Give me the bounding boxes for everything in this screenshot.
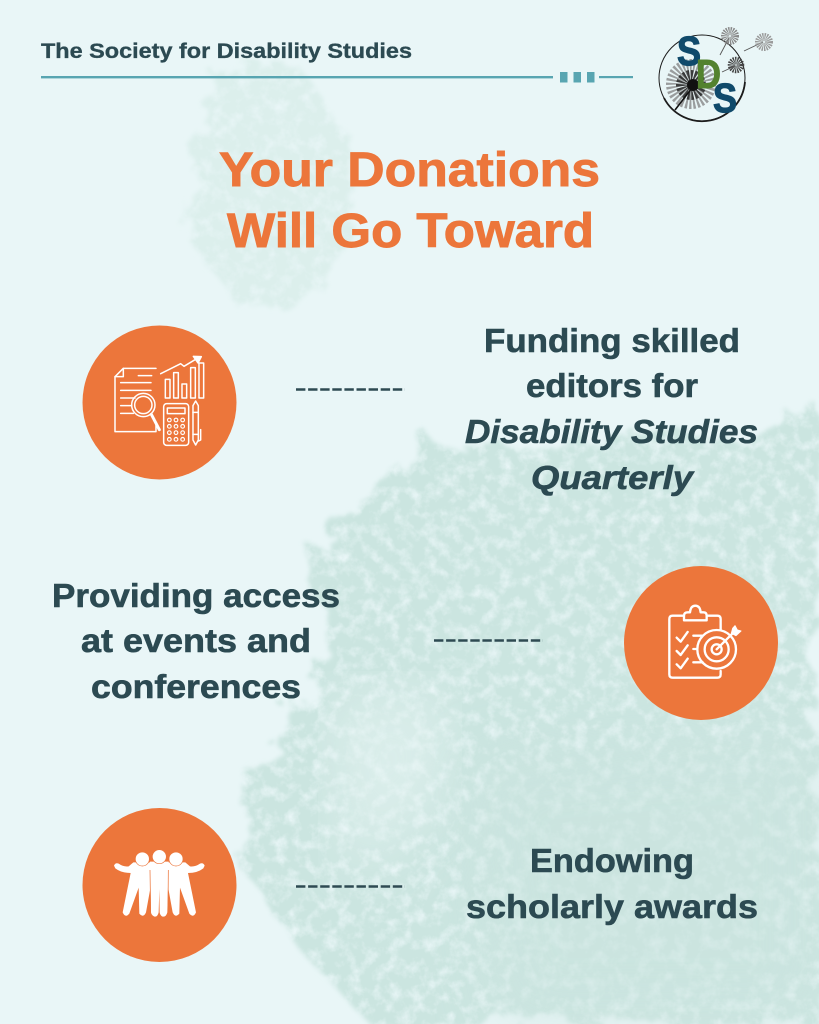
header: organisation name: The Society for Disability Studies <box>41 39 412 63</box>
item 1: text: Disability Studies <box>465 413 758 450</box>
logo: SDS dandelion: D <box>696 51 721 97</box>
item 2: text: at events and <box>81 622 311 659</box>
item 3: text: scholarly awards <box>466 888 758 925</box>
icon: three people embracing <box>114 850 205 917</box>
item 2: text: conferences <box>91 668 301 705</box>
title: Will Go Toward <box>227 205 594 258</box>
item 1: text: editors for <box>526 367 698 404</box>
logo letters: S <box>677 28 701 74</box>
item 2: text: Providing access <box>52 577 340 614</box>
icon: report and analysis <box>115 356 204 445</box>
item 1: text: Quarterly <box>531 459 695 496</box>
item 3: dashed connector <box>296 885 405 888</box>
item 3: icon circle with three people <box>82 808 236 962</box>
logo dandelion head <box>675 71 704 110</box>
logo ring <box>659 35 745 121</box>
item 1: icon circle with report, chart and calculator <box>82 326 236 480</box>
item 2: text <box>52 577 340 705</box>
item 3: text <box>466 842 758 925</box>
title <box>219 144 600 258</box>
logo: SDS dandelion <box>659 28 769 121</box>
item 1: dashed connector <box>296 388 405 391</box>
item 3: text: Endowing <box>530 842 694 879</box>
logo: SDS dandelion: S <box>713 75 737 121</box>
title: Your Donations <box>219 144 600 197</box>
icon: clipboard and target <box>669 606 741 678</box>
item 1: text <box>465 322 758 496</box>
item 2: dashed connector <box>434 639 543 642</box>
item 1: text: Funding skilled <box>484 322 740 359</box>
logo floating seeds <box>720 31 769 72</box>
header rule with three squares <box>41 72 633 82</box>
item 2: icon circle with clipboard and target <box>624 566 778 720</box>
